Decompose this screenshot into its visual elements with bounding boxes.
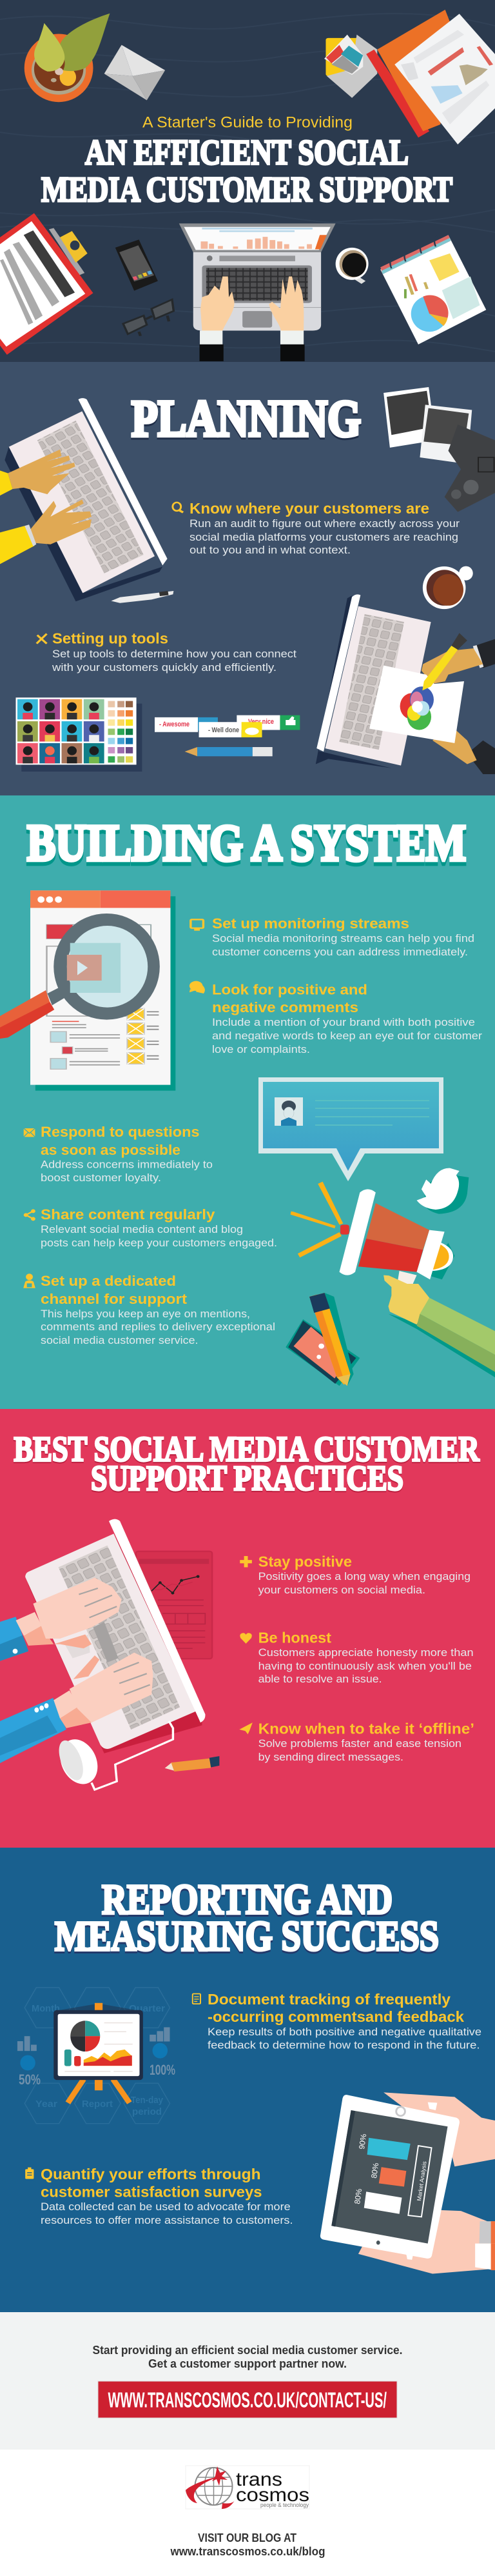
planning background (0, 362, 495, 795)
text block: respond to questions: Respond to questions (41, 1124, 200, 1140)
icon: report folder (366, 10, 495, 145)
text block: know where your customers are: social media platforms your customers are reaching (189, 531, 458, 543)
text block: dedicated channel for support: Set up a dedicated (41, 1273, 176, 1289)
panel: planning (0, 362, 495, 795)
illustration: typing on laptop with mouse (0, 1519, 212, 1790)
best practices background (0, 1409, 495, 1848)
call to action background (0, 2312, 495, 2450)
icon: twitter bird (417, 1168, 469, 1214)
text block: quantify efforts: customer satisfaction surveys (41, 2183, 262, 2200)
heading: best social media customer support practices: SUPPORT PRACTICES (91, 1458, 403, 1498)
text block: share content regularly: Relevant social media content and blog (41, 1223, 243, 1235)
illustration: typing on laptop (0, 398, 168, 601)
text block: know when to take it offline: by sending direct messages. (258, 1751, 403, 1763)
illustration: feedback badges: - Awesome (159, 721, 189, 728)
cta text (93, 2344, 402, 2370)
text block: quantify efforts (25, 2166, 293, 2226)
text block: quantify efforts: Data collected can be used to advocate for more (41, 2201, 291, 2213)
text block: document tracking: feedback to determine how to respond in the future. (208, 2039, 480, 2052)
title (41, 133, 452, 209)
blog link text (170, 2531, 325, 2558)
text block: stay positive: your customers on social media. (258, 1584, 425, 1596)
logo: transcosmos (186, 2466, 309, 2509)
text block: look for positive and negative comments: and negative words to keep an eye out for customer (212, 1030, 482, 1042)
text block: dedicated channel for support: channel for support (41, 1291, 188, 1307)
illustration: laptop with colour sketch (316, 594, 495, 774)
icon: globe (186, 2466, 235, 2509)
text block: know where your customers are: Know where your customers are (189, 500, 429, 517)
blog link text: VISIT OUR BLOG AT (198, 2531, 296, 2544)
text block: be honest: able to resolve an issue. (258, 1673, 382, 1685)
illustration: tablet in hands (320, 2092, 495, 2273)
text block: setting up tools (37, 630, 296, 674)
icon: document (193, 1994, 200, 2004)
footer background (0, 2450, 495, 2576)
icon: tools (37, 634, 46, 644)
text block: set up monitoring streams: customer concerns you can address immediately. (212, 946, 468, 958)
text block: know where your customers are (173, 500, 460, 556)
text block: document tracking: -occurring commentsand feedback (208, 2008, 464, 2025)
illustration: speech bubble (258, 1077, 443, 1181)
illustration: hexagon labels: Month (32, 2003, 60, 2014)
illustration: pen (111, 591, 173, 603)
title: AN EFFICIENT SOCIAL (85, 133, 409, 172)
illustration: tablet and pencil (286, 1293, 360, 1386)
text block: document tracking (193, 1991, 481, 2052)
icon: survey clipboard (25, 2168, 34, 2179)
icon: magnifying glass (0, 914, 160, 1039)
icon: laptop with hands (179, 223, 336, 361)
text block: document tracking: Keep results of both positive and negative qualitative (208, 2026, 481, 2038)
text block: share content regularly: Share content regularly (41, 1206, 215, 1223)
text block: look for positive and negative comments: Include a mention of your brand with both positive (212, 1016, 475, 1028)
panel: call to action (0, 2312, 495, 2450)
icon: magnifier (173, 503, 183, 512)
text block: respond to questions (24, 1124, 213, 1184)
icon: smartphone (115, 239, 158, 291)
cta text: Start providing an efficient social media customer service. (93, 2344, 402, 2357)
illustration: tablet in hands: 90% (357, 2133, 368, 2150)
text block: document tracking: Document tracking of frequently (208, 1991, 451, 2008)
illustration: hexagon labels: period (132, 2106, 162, 2117)
text block: setting up tools: Setting up tools (52, 630, 168, 646)
icon: plus (240, 1556, 252, 1567)
text block: dedicated channel for support: comments and replies to delivery exceptional (41, 1321, 275, 1333)
illustration: desk items (0, 10, 495, 361)
icon: heart (240, 1633, 252, 1644)
illustration: hexagon labels (24, 1988, 170, 2124)
icon: glasses (123, 299, 173, 336)
text block: know where your customers are: Run an audit to figure out where exactly across your (189, 517, 460, 530)
illustration: presentation board (53, 2003, 143, 2103)
blog link text: www.transcosmos.co.uk/blog (170, 2545, 325, 2558)
text block: set up monitoring streams (191, 915, 474, 958)
illustration: progress stats: 50% (19, 2072, 41, 2088)
logo: transcosmos: cosmos (236, 2484, 309, 2506)
icon: plant (24, 14, 110, 102)
illustration: tablet in hands: 80% (369, 2162, 380, 2179)
text block: dedicated channel for support (23, 1273, 275, 1346)
heading: reporting and measuring success (55, 1876, 439, 1960)
logo: transcosmos: people & technology (260, 2502, 309, 2508)
illustration: blue pencil (185, 747, 273, 756)
wood background (0, 0, 495, 362)
text block: share content regularly: posts can help keep your customers engaged. (41, 1237, 277, 1249)
panel: header (0, 0, 495, 362)
illustration: web page under magnifier (30, 890, 175, 1091)
text block: quantify efforts: Quantify your efforts through (41, 2166, 261, 2182)
illustration: avatar grid with swatches (15, 697, 142, 772)
text block: be honest (240, 1629, 474, 1685)
illustration: photos and camera (383, 387, 495, 512)
illustration: hexagon labels: Year (35, 2099, 57, 2110)
heading: best social media customer support practices (14, 1430, 480, 1498)
text block: respond to questions: boost customer loyalty. (41, 1172, 161, 1184)
illustration: megaphone with hand (291, 1182, 495, 1377)
text block: be honest: Customers appreciate honesty more than (258, 1646, 474, 1659)
icon: share (24, 1209, 35, 1221)
text block: stay positive (240, 1553, 471, 1596)
illustration: tablet in hands: Market Analysis (416, 2161, 428, 2201)
panel: best practices (0, 1409, 495, 1848)
text block: be honest: Be honest (258, 1629, 331, 1646)
text block: share content regularly (24, 1206, 277, 1249)
text block: setting up tools: Set up tools to determine how you can connect (52, 648, 296, 660)
illustration: hexagon labels: Report (82, 2099, 113, 2110)
illustration: tablet in hands: 80% (353, 2188, 364, 2204)
icon: coffee cup (336, 248, 369, 284)
icon: notebook with charts (380, 235, 486, 344)
reporting background (0, 1848, 495, 2312)
text block: set up monitoring streams: Social media monitoring streams can help you find (212, 932, 474, 944)
cta text: Get a customer support partner now. (148, 2357, 347, 2370)
illustration: progress stats (17, 2027, 175, 2088)
illustration: coffee mug (423, 566, 473, 609)
icon: monitor (191, 919, 203, 931)
icon: support person (23, 1273, 35, 1288)
illustration: orange pencil (165, 1756, 219, 1772)
text block: know when to take it offline: Know when to take it ‘offline’ (258, 1720, 474, 1737)
icon: chat bubbles (189, 981, 205, 993)
icon: paper plane (239, 1722, 253, 1734)
text block: stay positive: Stay positive (258, 1553, 352, 1570)
text block: stay positive: Positivity goes a long way when engaging (258, 1570, 471, 1583)
text block: respond to questions: Address concerns immediately to (41, 1159, 213, 1171)
logo: transcosmos: trans (236, 2469, 282, 2490)
illustration: hexagon labels: Quarter (129, 2003, 165, 2014)
heading: planning: PLANNING (131, 391, 361, 448)
panel: building a system (0, 795, 495, 1409)
text block: look for positive and negative comments: negative comments (212, 999, 358, 1015)
subtitle: A Starter's Guide to Providing (142, 114, 353, 132)
panel: reporting (0, 1848, 495, 2312)
text block: know when to take it offline: Solve problems faster and ease tension (258, 1737, 461, 1750)
text block: know where your customers are: out to you and in what context. (189, 544, 351, 556)
text block: be honest: having to continuously ask when you'll be (258, 1660, 472, 1672)
text block: setting up tools: with your customers quickly and efficiently. (52, 661, 277, 674)
icon: envelope (104, 45, 165, 100)
illustration: hexagon labels: Ten-day (131, 2095, 164, 2106)
text block: dedicated channel for support: social media customer service. (41, 1334, 199, 1346)
illustration: feedback badges: Very nice (248, 718, 274, 726)
text block: quantify efforts: resources to offer more assistance to customers. (41, 2214, 293, 2226)
text block: look for positive and negative comments (189, 981, 482, 1055)
text block: respond to questions: as soon as possible (41, 1142, 180, 1158)
icon: clipboard (0, 213, 93, 355)
text block: dedicated channel for support: This helps you keep an eye on mentions, (41, 1308, 250, 1320)
cta button (98, 2381, 397, 2418)
icon: letter and newspaper (324, 35, 377, 98)
illustration: progress stats: 100% (150, 2062, 175, 2078)
text block: know when to take it offline (239, 1720, 474, 1763)
text block: look for positive and negative comments: Look for positive and (212, 982, 367, 997)
illustration: feedback badges (155, 715, 300, 737)
illustration: feedback badges: - Well done (208, 726, 239, 734)
panel: footer (0, 2450, 495, 2576)
building background (0, 795, 495, 1409)
text block: look for positive and negative comments: love or complaints. (212, 1043, 310, 1055)
heading: reporting and measuring success: REPORTING AND (102, 1876, 393, 1923)
icon: mail (24, 1128, 35, 1137)
text block: set up monitoring streams: Set up monitoring streams (212, 915, 409, 932)
